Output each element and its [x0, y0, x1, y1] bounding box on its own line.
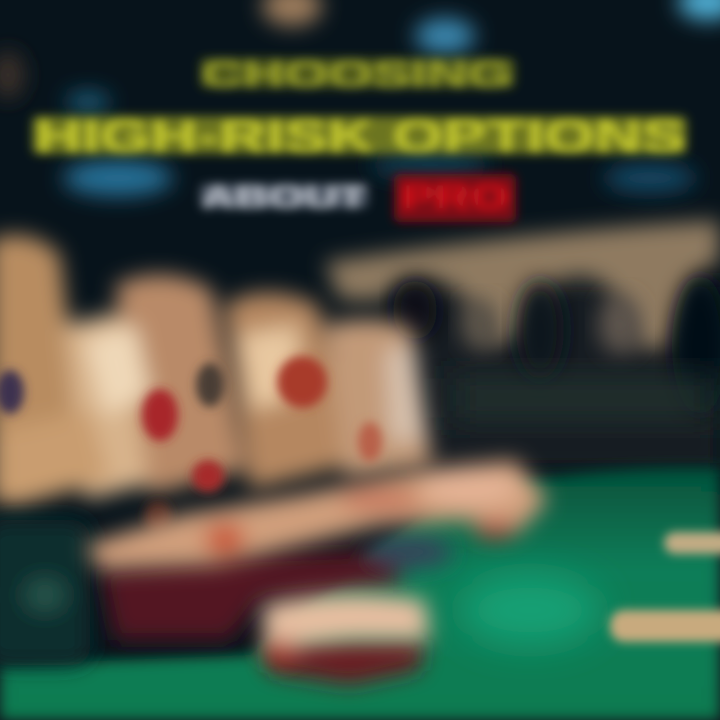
background glows — [0, 0, 720, 196]
bridge with arches — [325, 220, 720, 470]
felt highlight — [460, 575, 600, 645]
title line 2: HIGH-RISK OPTIONS — [35, 110, 685, 162]
red highlight badge — [394, 174, 516, 222]
red chip stacks — [100, 536, 452, 685]
card suit marks — [0, 356, 382, 532]
title — [32, 54, 687, 222]
dark green chip stack left — [0, 520, 90, 665]
cream chip tops — [85, 460, 548, 664]
title line 1 — [200, 54, 515, 96]
title line 3 — [200, 179, 368, 215]
title line 1: CHOOSING — [202, 54, 512, 96]
playing cards fan — [0, 235, 432, 505]
title line 3: ABOUT — [202, 179, 367, 215]
green felt table — [0, 468, 720, 720]
red highlight badge: PRO — [401, 179, 509, 215]
chips on right of table — [610, 532, 720, 642]
